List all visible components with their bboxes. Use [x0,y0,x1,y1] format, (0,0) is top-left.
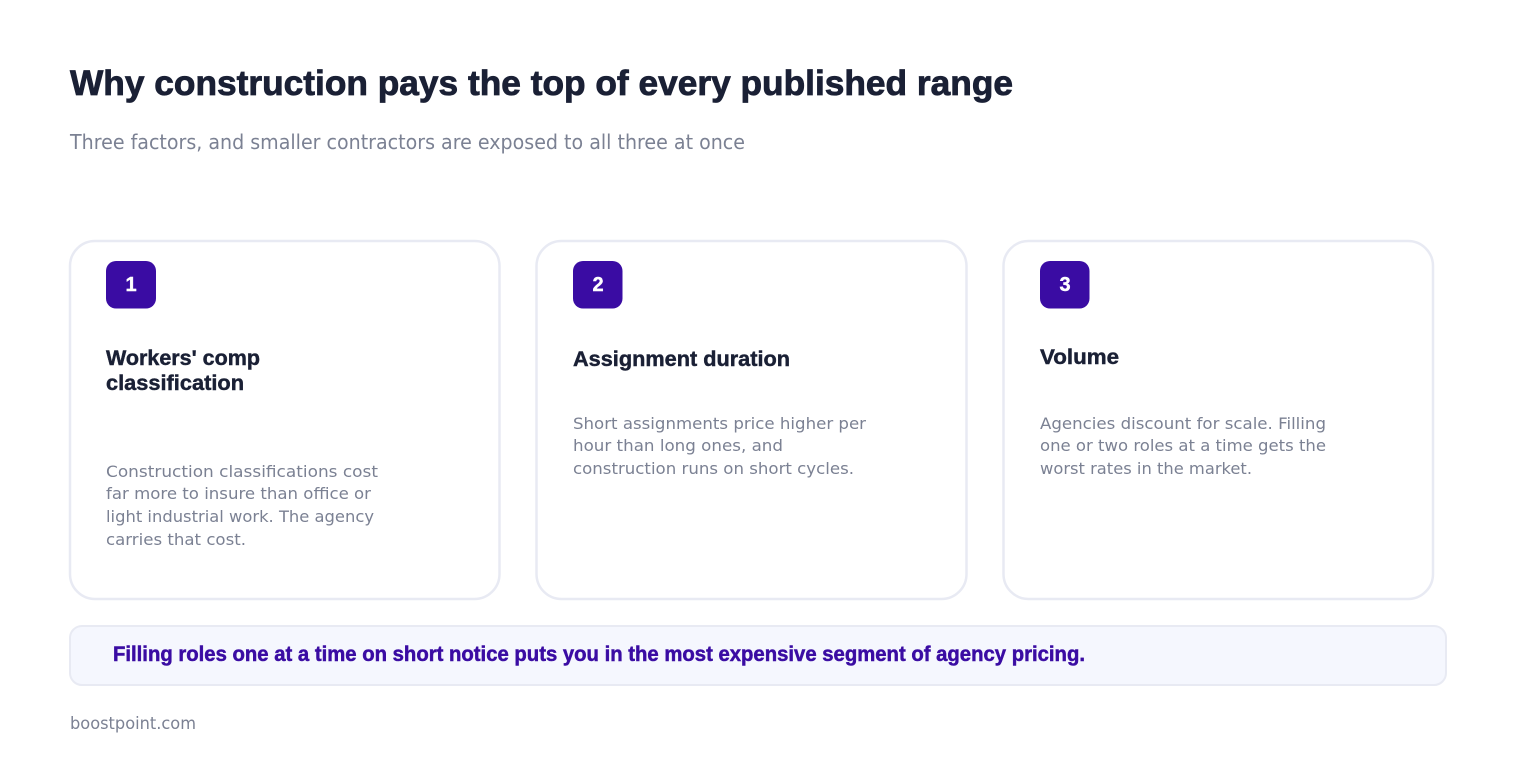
panel: workers' comp classification [70,241,500,599]
text: workers' comp description: light industrial work. The agency [106,507,374,526]
icon: number badge 1 [106,261,156,308]
text: volume description [1040,414,1326,478]
heading: workers' comp classification [106,347,260,395]
text: workers' comp description: far more to insure than office or [106,484,371,503]
text: workers' comp description: carries that cost. [106,530,246,549]
text: volume description: Agencies discount for scale. Filling [1040,414,1326,433]
callout [70,626,1446,685]
title: Why construction pays the top of every published range [70,64,1013,103]
heading: workers' comp classification: Workers' comp [106,347,260,370]
icon: number badge 1: 1 [125,274,137,296]
text: workers' comp description [106,462,378,549]
icon: number badge 3: 3 [1059,274,1071,296]
footer source: boostpoint.com [70,714,196,734]
text: volume description: one or two roles at a time gets the [1040,436,1326,455]
text: volume description: worst rates in the market. [1040,459,1252,478]
callout: Filling roles one at a time on short notice puts you in the most expensive segment of agency pricing. [113,643,1085,666]
heading: workers' comp classification: classification [106,372,244,395]
heading: volume: Volume [1040,346,1119,369]
heading: assignment duration: Assignment duration [573,348,790,371]
icon: number badge 3 [1040,261,1090,308]
text: assignment duration description [573,414,866,478]
text: assignment duration description: construction runs on short cycles. [573,459,854,478]
icon: number badge 2: 2 [592,274,604,296]
panel: volume [1004,241,1433,599]
text: workers' comp description: Construction classifications cost [106,462,378,481]
text: assignment duration description: Short assignments price higher per [573,414,866,433]
icon: number badge 2 [573,261,622,308]
text: assignment duration description: hour than long ones, and [573,436,783,455]
subtitle: Three factors, and smaller contractors are exposed to all three at once [69,130,745,154]
panel: assignment duration [536,241,966,599]
